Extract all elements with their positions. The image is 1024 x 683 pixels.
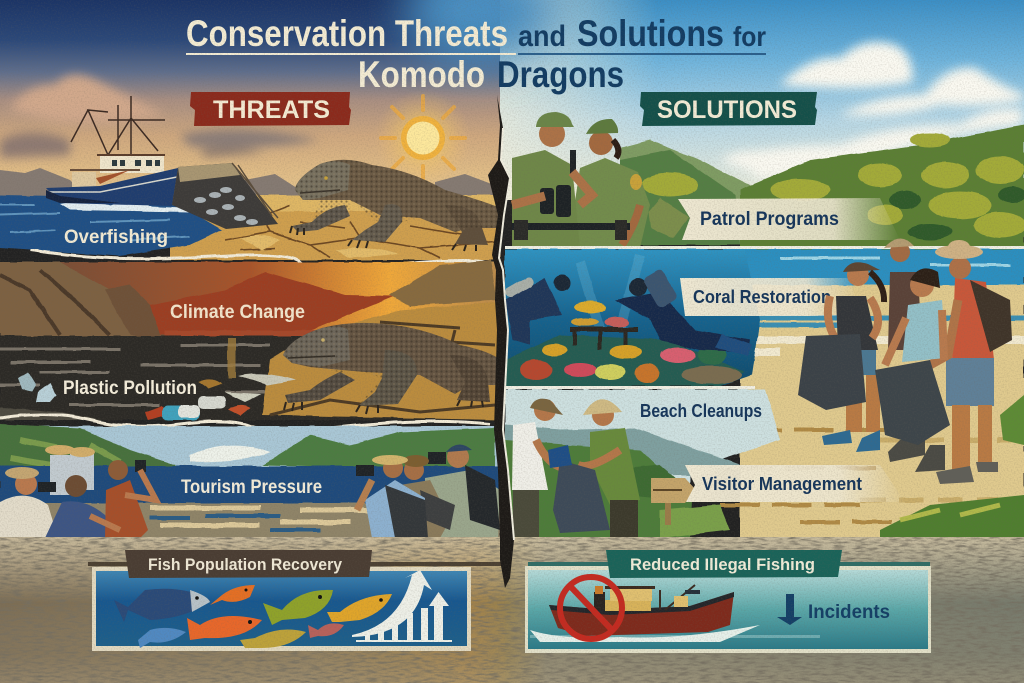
komodo dragon on cracked earth: [290, 160, 498, 251]
title: and: [518, 20, 566, 53]
left group of tourists: [0, 445, 156, 538]
torn white divider 2: [0, 414, 490, 430]
foreground foliage: [1000, 395, 1024, 445]
sky blend across the seam: [405, 0, 555, 65]
torn paper centre divider: [488, 95, 514, 588]
ribbon: Coral Restoration: [680, 278, 860, 316]
school of fish: [114, 585, 392, 648]
header tab: Fish Population Recovery: [148, 555, 343, 574]
white divider: [505, 386, 755, 389]
heading: SOLUTIONS banner: SOLUTIONS: [657, 96, 797, 124]
fishing boat with net: [46, 96, 278, 229]
red small fish: [308, 623, 344, 638]
sun baked ground: [262, 302, 500, 420]
fish panel water: [96, 571, 467, 646]
header tab: [125, 550, 372, 578]
volunteer in brown, rear: [884, 238, 922, 350]
blue striped fish: [114, 589, 210, 622]
header tab: [606, 550, 842, 578]
icon: banned fishing boat: [530, 577, 820, 642]
title: [186, 13, 766, 95]
polluted dark water: [0, 336, 500, 420]
label: Plastic Pollution: Plastic Pollution: [63, 378, 197, 399]
olive fish: [240, 630, 306, 648]
torn white divider 1: [30, 250, 490, 268]
title: Conservation Threats: [186, 13, 508, 54]
large orange fish: [187, 616, 262, 640]
small blue fish: [138, 628, 186, 648]
title: Solutions: [577, 13, 724, 54]
solutions sky and clouds: [500, 0, 1024, 200]
fishing panel water: [528, 570, 928, 649]
title: Komodo: [358, 54, 485, 95]
ribbon: Patrol Programs: [678, 198, 900, 240]
heading: THREATS banner: THREATS: [213, 96, 330, 124]
ribbon: Visitor Management: [685, 465, 905, 502]
forested hills: [620, 125, 1024, 250]
beach with shallow water: [505, 249, 1024, 540]
fish panel top rule: [88, 562, 502, 566]
sea under the boat: [0, 195, 222, 256]
panel: outcomes footer background: [0, 537, 1024, 683]
boulder arrow pointer: [648, 198, 689, 238]
icon: wooden direction sign: [651, 478, 696, 525]
tourism scene backdrop: [0, 424, 500, 540]
icon: blazing sun: [375, 90, 471, 186]
rangers with binoculars: [512, 112, 650, 248]
coral restoration underwater scene: [505, 250, 760, 386]
fishing panel frame: [525, 566, 931, 653]
volunteers with rubbish bags: [798, 238, 1024, 538]
beach cleanup lower scene: [505, 389, 780, 538]
ribbon: Coral Restoration: Coral Restoration: [693, 287, 831, 307]
label: Incidents: Incidents: [808, 602, 890, 623]
icon: down arrow: [777, 594, 802, 625]
panel: threats scene (left half): [0, 0, 512, 540]
right group of tourists: [356, 444, 500, 538]
label: Climate Change: Climate Change: [170, 302, 305, 323]
fishing panel top rule: [528, 562, 930, 566]
cracks on baked ground: [270, 322, 495, 415]
fish panel frame: [92, 567, 471, 651]
climate change scene: [0, 260, 500, 342]
header tab: Reduced Illegal Fishing: [630, 555, 815, 574]
ribbon: Patrol Programs: Patrol Programs: [700, 209, 839, 230]
rubbish bag 2: [875, 360, 950, 445]
white shoreline stripe: [505, 246, 1024, 249]
label: Beach Cleanups: Beach Cleanups: [640, 401, 762, 421]
title: Dragons: [497, 54, 624, 95]
cracked earth ground: [170, 195, 500, 260]
plastic bottles and litter: [18, 372, 296, 420]
people bagging rubbish: [512, 399, 640, 538]
panel: fish population recovery: [88, 550, 502, 651]
recovery bar chart with rising arrow: [352, 570, 452, 642]
woman in blue top: [885, 268, 946, 472]
small orange fish: [210, 585, 255, 605]
heading: THREATS banner: [190, 92, 351, 126]
ribbon: Visitor Management: Visitor Management: [702, 473, 862, 494]
rubbish bag 1: [798, 334, 866, 410]
label: Overfishing: Overfishing: [64, 227, 168, 248]
tall man with backpack: [930, 240, 1012, 484]
title: for: [733, 21, 766, 52]
distant mountains left: [0, 168, 497, 198]
yellow fish: [327, 594, 392, 622]
panel: reduced illegal fishing: [525, 550, 931, 653]
threats sky: [0, 0, 512, 200]
green fish: [263, 590, 333, 625]
komodo dragon: [283, 323, 498, 414]
panel: solutions scene (right half): [405, 0, 1024, 540]
heading: SOLUTIONS banner: [640, 92, 817, 126]
woman in black top: [822, 262, 884, 452]
divers: [505, 268, 752, 355]
label: Tourism Pressure: Tourism Pressure: [181, 477, 322, 498]
